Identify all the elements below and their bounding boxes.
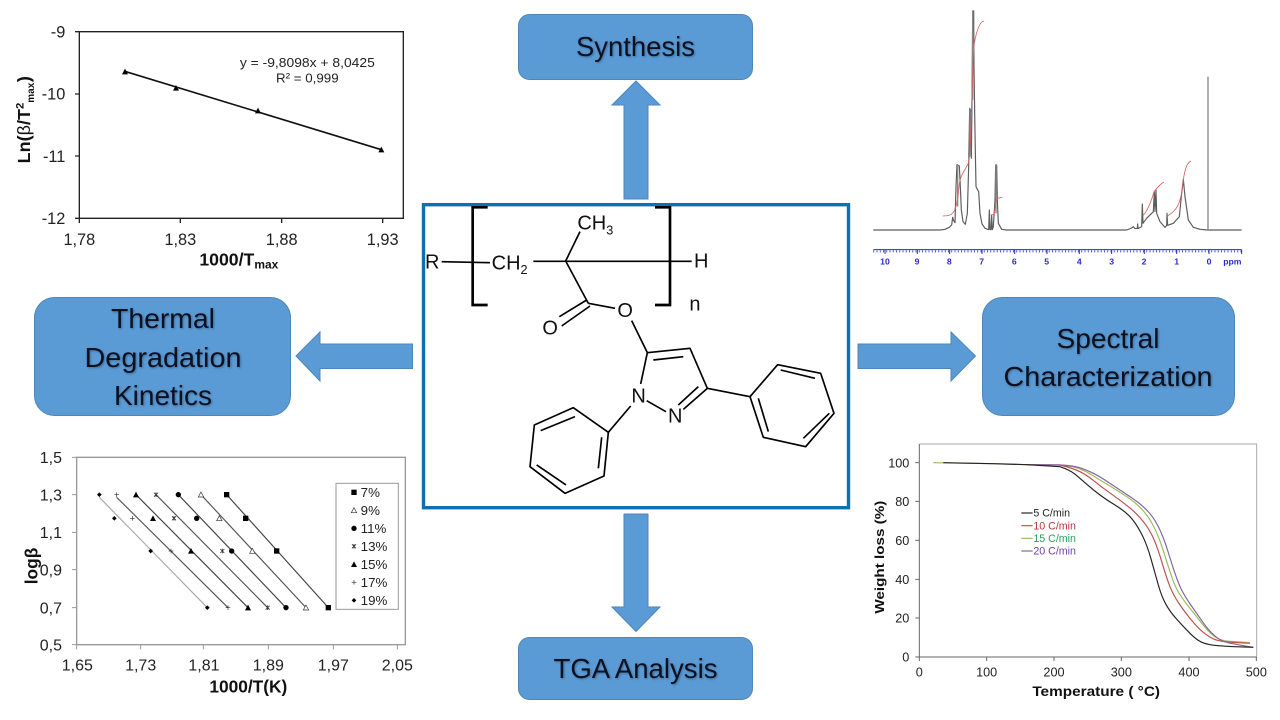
- atom labels: CH: [492, 252, 521, 274]
- y axis title: max: [26, 82, 37, 103]
- atom labels: N: [668, 406, 682, 428]
- curve legend: 20 C/min: [1033, 546, 1076, 558]
- x tick labels: 500: [1246, 666, 1267, 680]
- y tick labels: 40: [895, 573, 909, 587]
- x tick labels: 1,83: [164, 231, 196, 249]
- panel: Synthesis: [518, 14, 752, 80]
- panel: Spectral Characterization: Spectral: [1056, 323, 1160, 354]
- regression equation: R² = 0,999: [276, 71, 339, 86]
- x tick labels: 1,93: [367, 231, 399, 249]
- legend: 19%: [361, 593, 387, 608]
- legend: 9%: [361, 503, 380, 518]
- plot frame: [919, 444, 1257, 657]
- curve legend: 15 C/min: [1033, 533, 1076, 545]
- y axis title: Ln(β/T: [14, 109, 34, 163]
- y axis title: 2: [14, 103, 26, 109]
- y tick labels: 0,5: [40, 637, 62, 654]
- ppm axis: [873, 250, 1242, 254]
- legend: 15%: [361, 557, 387, 572]
- x axis title: 1000/T: [199, 249, 254, 269]
- spectrum trace: [873, 11, 1242, 230]
- axis ticks: [915, 463, 1256, 661]
- bonds: [442, 232, 834, 493]
- legend: 13%: [361, 539, 387, 554]
- panel: Thermal Degradation Kinetics: Thermal: [111, 303, 215, 334]
- y tick labels: 20: [895, 612, 909, 626]
- x tick labels: 200: [1043, 666, 1065, 680]
- x tick labels: 1,89: [253, 658, 284, 675]
- y tick labels: 80: [895, 495, 909, 509]
- axis ticks: [75, 32, 383, 223]
- y tick labels: 100: [888, 456, 909, 470]
- tall solvent and TMS peaks: [958, 11, 1208, 230]
- regression equation: [240, 55, 375, 86]
- y tick labels: 60: [895, 534, 909, 548]
- axis ticks: [72, 457, 397, 649]
- x tick labels: 1,73: [125, 658, 156, 675]
- x tick labels: 1,88: [266, 231, 298, 249]
- atom labels: [425, 212, 708, 428]
- chart: log beta vs 1000/T: [22, 450, 413, 696]
- atom labels: R: [425, 251, 439, 273]
- ppm labels: 6: [1012, 257, 1017, 267]
- chart: NMR spectrum: [873, 11, 1242, 267]
- integral curves: [943, 21, 1191, 216]
- legend: 11%: [361, 521, 386, 536]
- ppm labels: 2: [1142, 257, 1147, 267]
- arrow: right to Spectral Characterization: [858, 332, 976, 381]
- atom labels: 2: [521, 263, 528, 277]
- y tick labels: 0: [902, 651, 909, 665]
- atom labels: H: [694, 251, 708, 273]
- panel: TGA Analysis: [518, 638, 752, 700]
- x axis title: Temperature ( °C): [1032, 684, 1160, 699]
- x tick labels: [63, 231, 399, 249]
- panel: Spectral Characterization: Characterization: [1004, 361, 1212, 392]
- ppm labels: 3: [1109, 257, 1114, 267]
- ppm labels: ppm: [1223, 257, 1242, 267]
- x tick labels: [916, 666, 1267, 680]
- ppm labels: 4: [1077, 257, 1082, 267]
- panel: Thermal Degradation Kinetics: [34, 298, 290, 416]
- y tick labels: -10: [42, 86, 65, 104]
- x tick labels: [62, 658, 413, 675]
- y axis title: Weight loss (%): [872, 501, 887, 614]
- x tick labels: 0: [916, 666, 923, 680]
- ppm labels: 1: [1174, 257, 1179, 267]
- curve legend: [1021, 508, 1076, 558]
- y tick labels: 1,5: [40, 450, 62, 467]
- atom labels: CH: [577, 212, 606, 234]
- x tick labels: 100: [976, 666, 997, 680]
- x tick labels: 1,81: [188, 658, 220, 675]
- legend: [336, 483, 398, 609]
- series markers: [97, 492, 331, 610]
- ppm labels: 7: [979, 257, 984, 267]
- chemical structure: [425, 207, 834, 493]
- series lines: [99, 495, 328, 608]
- panel: central polymer structure: [424, 205, 848, 508]
- y tick labels: -11: [43, 148, 65, 166]
- chart: Ln(beta/T2max) vs 1000/Tmax: [14, 23, 403, 272]
- arrow: up to Synthesis: [612, 81, 660, 199]
- ppm labels: 8: [947, 257, 952, 267]
- panel: TGA Analysis: TGA Analysis: [554, 653, 718, 684]
- curve legend: 5 C/min: [1033, 508, 1070, 520]
- panel: Thermal Degradation Kinetics: Degradation: [84, 342, 242, 373]
- y tick labels: 0,7: [40, 600, 62, 617]
- y tick labels: -9: [51, 23, 65, 41]
- plot frame: [77, 457, 405, 645]
- chart: TGA weight loss curves: [872, 444, 1267, 699]
- ppm labels: [880, 257, 1242, 267]
- y axis title: logβ: [22, 548, 42, 584]
- ppm labels: 0: [1207, 257, 1212, 267]
- plot frame: [79, 32, 403, 218]
- y tick labels: [40, 450, 62, 654]
- fit line with data points: [122, 69, 384, 152]
- panel: Spectral Characterization: [982, 298, 1234, 416]
- atom labels: n: [689, 294, 700, 316]
- arrow: down to TGA Analysis: [612, 514, 660, 632]
- y tick labels: 1,3: [40, 487, 62, 504]
- atom labels: O: [617, 300, 633, 322]
- atom labels: N: [631, 385, 646, 407]
- panel: Thermal Degradation Kinetics: Kinetics: [114, 380, 212, 411]
- y tick labels: 0,9: [40, 562, 62, 579]
- x tick labels: 1,97: [318, 658, 349, 675]
- arrow: left to Thermal Degradation Kinetics: [296, 332, 412, 381]
- ppm labels: 5: [1044, 257, 1049, 267]
- weight loss curves: [933, 463, 1253, 647]
- x axis title: 1000/T(K): [209, 676, 287, 696]
- x tick labels: 400: [1178, 666, 1200, 680]
- y tick labels: [42, 23, 65, 228]
- curve legend: 10 C/min: [1033, 520, 1076, 532]
- y tick labels: -12: [42, 210, 65, 228]
- x tick labels: 2,05: [382, 658, 413, 675]
- y tick labels: [888, 456, 909, 665]
- regression equation: y = -9,8098x + 8,0425: [240, 55, 375, 70]
- atom labels: O: [542, 317, 558, 339]
- y axis title: ): [14, 76, 34, 82]
- ppm labels: 9: [915, 257, 920, 267]
- x tick labels: 300: [1111, 666, 1132, 680]
- legend: 7%: [361, 485, 380, 500]
- atom labels: 3: [606, 223, 613, 237]
- ppm labels: 10: [880, 257, 890, 267]
- legend: 17%: [361, 575, 387, 590]
- x axis title: max: [254, 258, 279, 272]
- y tick labels: 1,1: [40, 525, 62, 542]
- x tick labels: 1,65: [62, 658, 93, 675]
- panel: Synthesis: Synthesis: [576, 31, 695, 62]
- polymer brackets: [473, 207, 670, 305]
- x tick labels: 1,78: [63, 231, 95, 249]
